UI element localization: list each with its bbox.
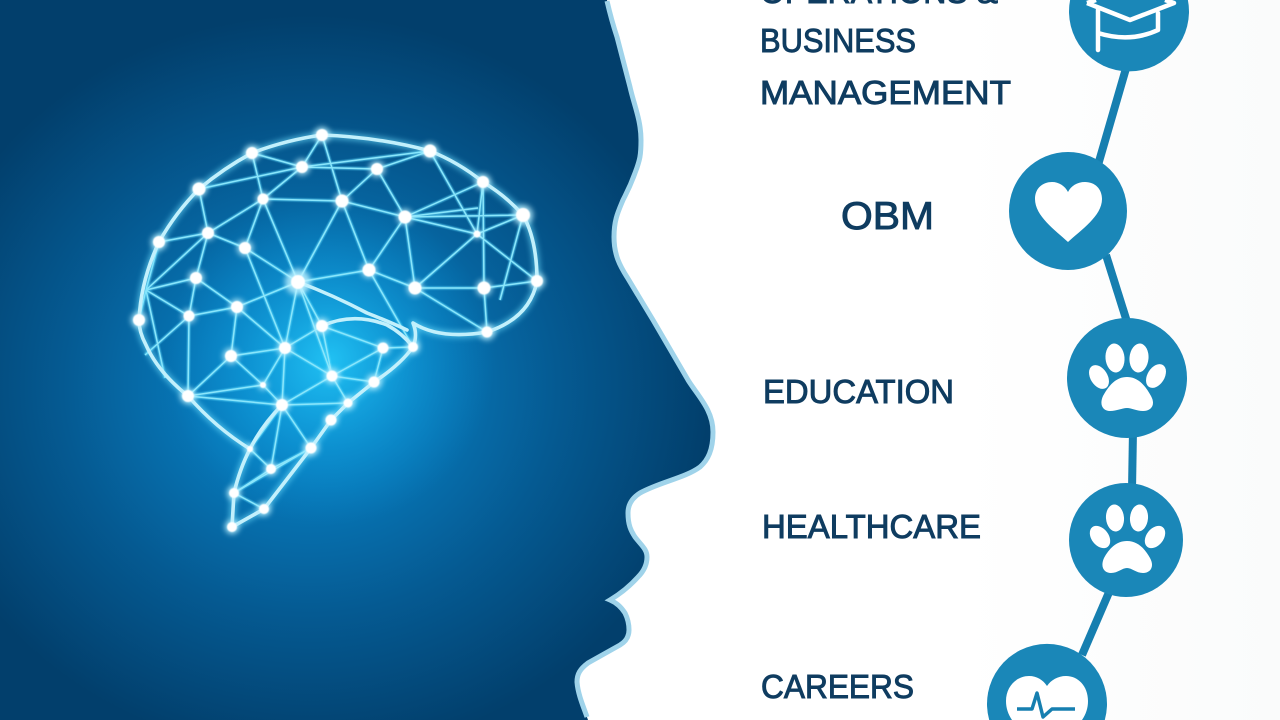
label: careers: CAREERS [761, 668, 914, 705]
icon: heart [1009, 152, 1127, 270]
label: healthcare: HEALTHCARE [762, 508, 981, 545]
icon: heart with pulse line [987, 644, 1107, 720]
brain network illustration [131, 127, 545, 534]
glow behind brain [155, 195, 505, 525]
step: healthcare [762, 483, 1183, 597]
timeline connector lines [1082, 65, 1133, 655]
label: operations and business management: BUSINESS [760, 22, 916, 59]
label: operations and business management: MANAGEMENT [760, 74, 1011, 111]
step: careers [761, 644, 1107, 720]
icon: paw [1069, 483, 1183, 597]
label: OBM: OBM [841, 195, 934, 238]
step: OBM [841, 152, 1127, 270]
label: operations and business management [760, 0, 1011, 111]
brain nodes [133, 129, 543, 532]
brain connections [139, 135, 537, 509]
brain outline [139, 135, 537, 527]
label: education: EDUCATION [763, 373, 954, 410]
panel: dark blue head silhouette [0, 0, 713, 720]
profile outline [577, 1, 713, 717]
step: education [763, 318, 1187, 438]
step: operations and business management [760, 0, 1189, 111]
brain node halos [131, 127, 545, 534]
icon: paw [1067, 318, 1187, 438]
blurred line glow [139, 135, 537, 509]
icon: graduation cap [1069, 0, 1189, 71]
brain outline glow [139, 135, 537, 527]
